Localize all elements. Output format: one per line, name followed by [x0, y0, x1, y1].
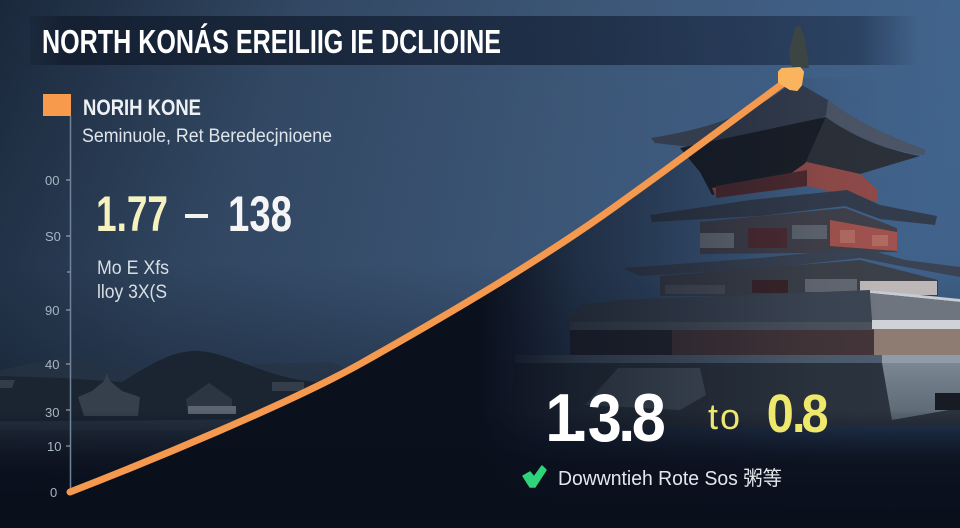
axis labels: 40	[45, 357, 59, 372]
axis labels: 30	[45, 405, 59, 420]
result caption: Dowwntieh Rote Sos 粥等	[558, 467, 782, 490]
chart axis	[45, 116, 70, 500]
result figure	[545, 379, 828, 456]
axis labels: 00	[45, 173, 59, 188]
steps	[585, 368, 706, 410]
range figure: 1.77	[96, 186, 168, 242]
axis labels: 10	[47, 439, 61, 454]
brick wall	[672, 330, 874, 355]
roof right face	[826, 100, 925, 155]
axis labels: 90	[45, 303, 59, 318]
orange trend curve	[70, 82, 785, 492]
result figure: to	[708, 396, 740, 437]
title band	[30, 16, 920, 65]
axis ticks	[66, 180, 70, 446]
upper balcony	[712, 162, 878, 202]
second roof	[650, 190, 937, 225]
white frieze	[570, 322, 874, 330]
result figure: 0.8	[767, 383, 828, 444]
curve end marker	[779, 68, 803, 90]
pagoda	[510, 84, 960, 430]
axis labels: S0	[45, 229, 61, 244]
eave underside left	[680, 117, 826, 195]
range figure	[96, 186, 292, 242]
range notes: Mo E Xfs	[97, 258, 169, 279]
stone base	[510, 355, 960, 430]
bottom fade	[0, 410, 960, 528]
third floor wall	[660, 260, 938, 296]
axis labels	[45, 173, 61, 500]
top roof	[651, 84, 925, 155]
legend subtitle: Seminuole, Ret Beredecjnioene	[82, 126, 332, 147]
pagoda finial	[789, 25, 809, 68]
legend heading: NORIH KONE	[83, 95, 201, 120]
range notes	[97, 258, 169, 303]
axis labels: 0	[50, 485, 57, 500]
third roof	[623, 250, 960, 277]
result figure: 1.3.8	[545, 379, 666, 456]
legend swatch	[43, 94, 71, 116]
eave underside right	[806, 117, 920, 174]
sign	[935, 393, 960, 410]
title: NORTH KONÁS EREILIIG IE DCLIOINE	[42, 23, 501, 60]
base roof	[565, 290, 960, 322]
range notes: lloy 3X(S	[97, 282, 167, 303]
icon: green check	[523, 466, 546, 487]
range figure: 138	[228, 186, 292, 242]
second floor wall	[700, 208, 897, 254]
background landscape: hill and temples	[0, 351, 360, 470]
